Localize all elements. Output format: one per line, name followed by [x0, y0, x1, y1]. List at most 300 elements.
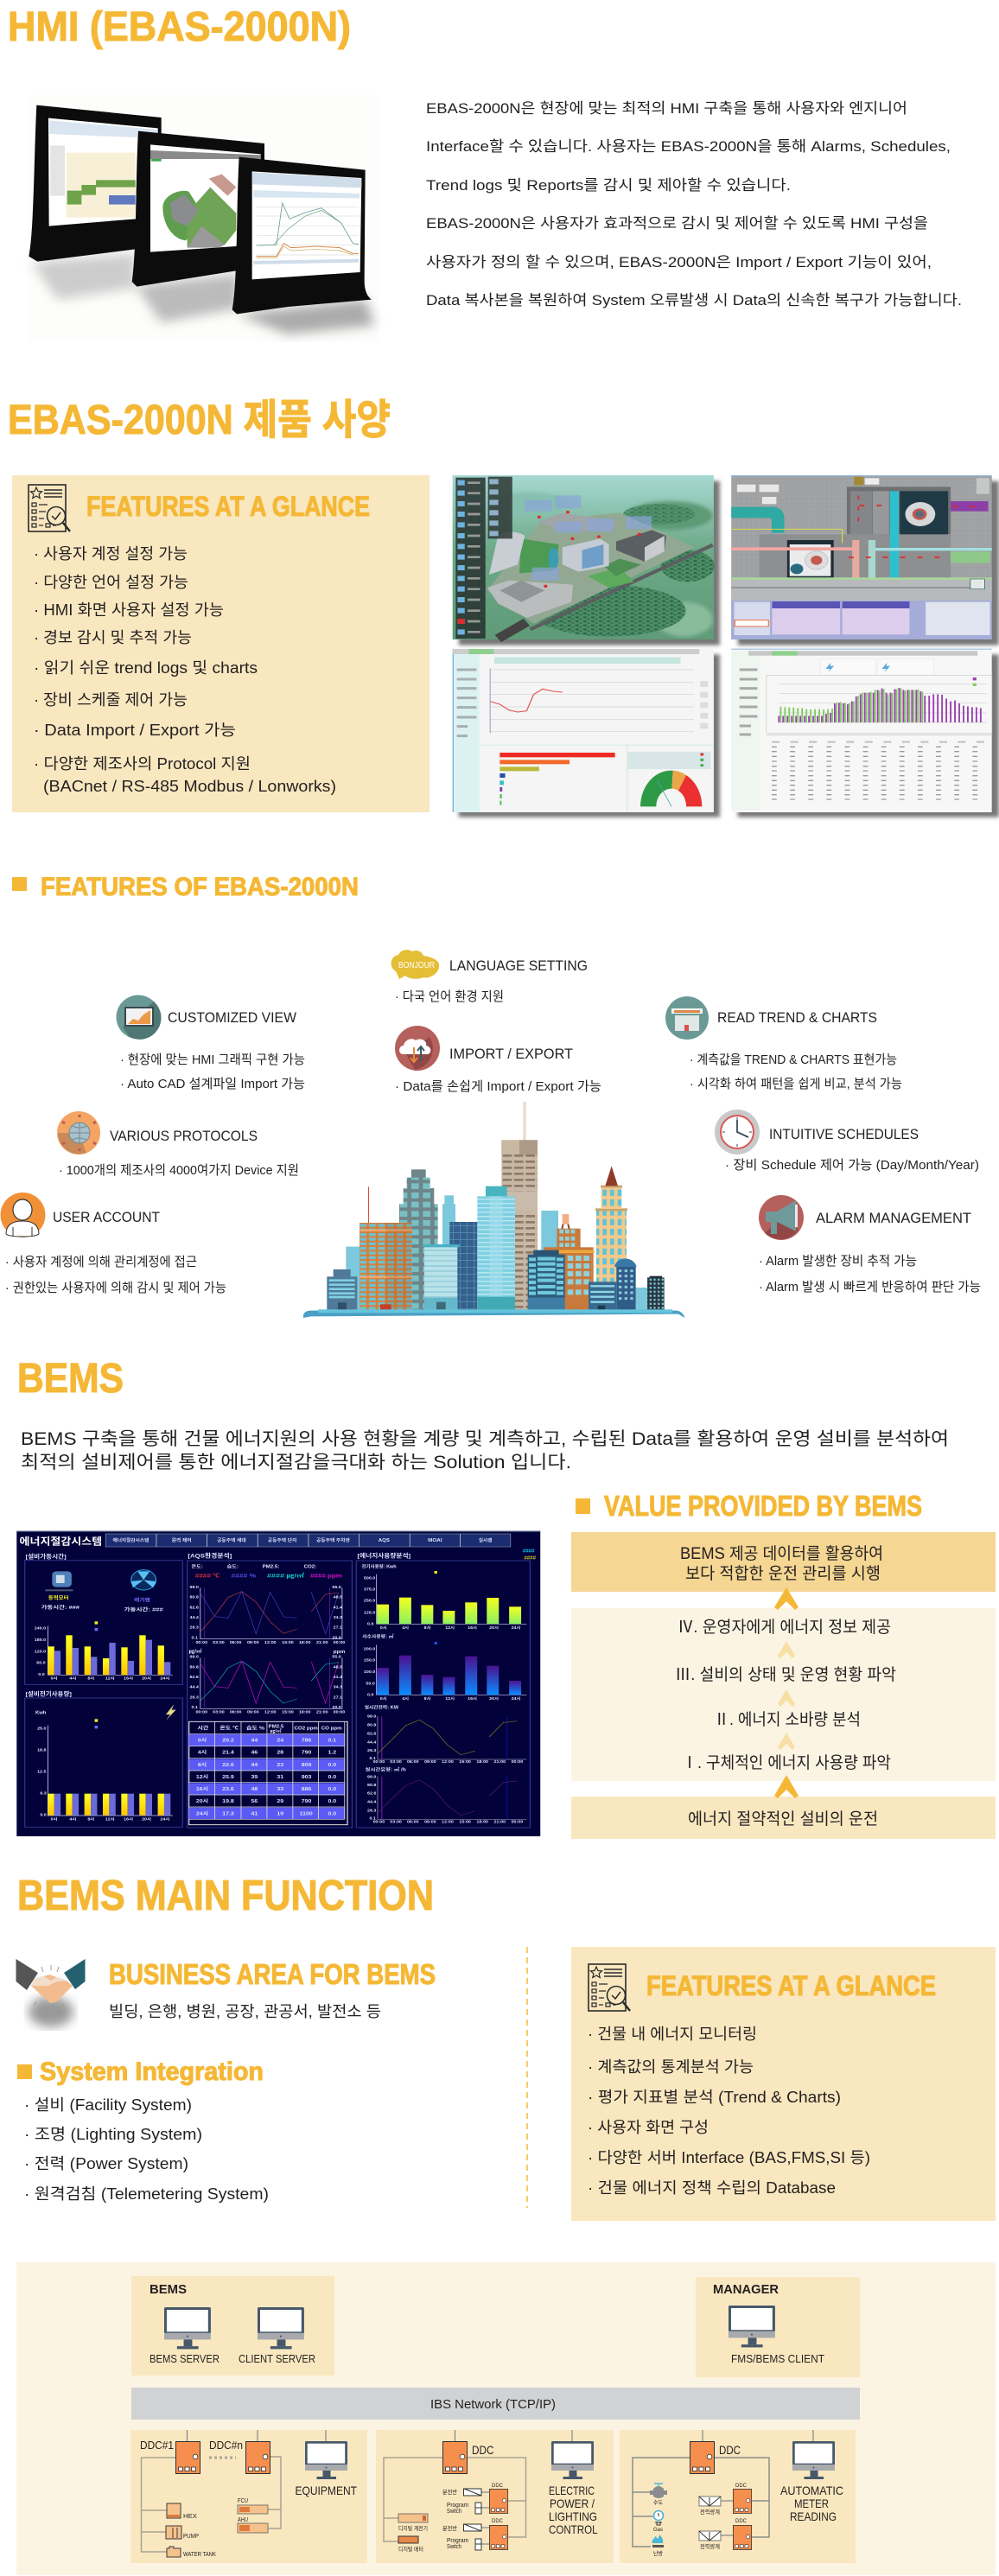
icon: bonjour cloud: BONJOUR	[398, 961, 435, 970]
data table: 0.0	[328, 1787, 337, 1792]
panel: energy use analysis: 50.0	[366, 1682, 375, 1686]
data table: 19	[277, 1811, 284, 1816]
title: HMI (EBAS-2000N): HMI (EBAS-2000N)	[8, 4, 351, 50]
panel: equipment running time: 240.0	[35, 1626, 46, 1631]
group: manager: FMS/BEMS CLIENT	[731, 2352, 824, 2365]
panel: energy use analysis: 62.6	[367, 1732, 377, 1736]
panel: energy use analysis: 0.0	[367, 1693, 374, 1697]
panel: energy use analysis: 8시	[424, 1696, 431, 1701]
heading: business area for BEMS: BUSINESS AREA FOR BEMS	[109, 1958, 436, 1990]
panel: energy use analysis: 0.1	[369, 1816, 376, 1821]
panel: energy use analysis: 12시	[445, 1696, 455, 1701]
panel: AQS environment analysis: 80.8	[189, 1595, 199, 1600]
panel: energy use analysis: 4시	[402, 1696, 409, 1701]
panel: equipment: DDC#n	[209, 2439, 243, 2452]
data table: 41	[251, 1811, 258, 1816]
monitor 2	[132, 131, 264, 287]
feature list: · 읽기 쉬운 trend logs 및 charts	[34, 659, 258, 677]
panel: automatic meter reading: READING	[790, 2509, 837, 2523]
bar: IBS network	[131, 2388, 860, 2420]
panel: energy use analysis: 62.6	[367, 1791, 377, 1796]
data table: 29	[277, 1799, 284, 1804]
group: BEMS servers	[131, 2276, 334, 2376]
data table: 44	[251, 1738, 258, 1743]
feature list: · 다양한 서버 Interface (BAS,FMS,SI 등)	[588, 2149, 870, 2166]
feature: alarm management: ALARM MANAGEMENT	[816, 1210, 971, 1226]
panel: energy use analysis: 16시	[468, 1696, 477, 1701]
data table: 20시	[196, 1799, 208, 1804]
feature: user account: · 사용자 계정에 의해 관리계정에 접근	[5, 1255, 197, 1269]
panel: equipment electricity use	[25, 1690, 182, 1827]
data table: 25.9	[222, 1775, 234, 1780]
panel: automatic meter reading: 전력량계	[700, 2508, 720, 2516]
panel: AQS environment analysis: 습도:	[227, 1563, 239, 1569]
panel: equipment electricity use: 12.5	[37, 1770, 47, 1774]
feature: various protocols: · 1000개의 제조사의 4000여가지 Device 지원	[59, 1163, 299, 1178]
panel: energy use analysis: 100.0	[364, 1670, 376, 1675]
panel: AQS environment analysis: 55.0	[332, 1585, 341, 1590]
panel: equipment running time: 가동시간: ###	[124, 1606, 163, 1612]
panel: AQS environment analysis: 15:00	[282, 1710, 294, 1714]
panel: energy use analysis: 0시	[380, 1625, 387, 1631]
feature: intuitive schedules: · 장비 Schedule 제어 가능 (Day/Month/Year)	[725, 1158, 979, 1173]
data table: 0.0	[328, 1763, 337, 1768]
dashboard: energy saving system	[16, 1531, 540, 1836]
panel: AQS environment analysis: 48.5	[334, 1665, 342, 1670]
panel: equipment: HEX	[183, 2514, 197, 2520]
text block: BEMS description: BEMS 구축을 통해 건물 에너지원의 사용 현황을 계량 및 계측하고, 수립된 Data를 활용하여 운영 설비를 분석하여	[21, 1429, 949, 1449]
panel: AQS environment analysis: 62.6	[189, 1675, 199, 1680]
panel: equipment electricity use: [설비전기사용량]	[26, 1690, 72, 1697]
icon: megaphone	[759, 1195, 804, 1240]
panel: energy use analysis: 99.0	[367, 1775, 377, 1779]
panel: energy use analysis: 200.0	[364, 1647, 376, 1651]
screen: bar chart and data table	[731, 649, 999, 817]
panel: electric power and lighting control: Switch	[447, 2544, 461, 2550]
panel: equipment electricity use: 0시	[51, 1817, 58, 1822]
data table: ㎍/㎥	[270, 1727, 283, 1734]
panel: equipment: PUMP	[183, 2534, 199, 2540]
panel: equipment running time: 가동시간: ###	[41, 1604, 80, 1611]
panel: energy use analysis: 00:00	[373, 1820, 385, 1824]
arrow: step 3	[778, 1641, 795, 1658]
panel: energy use analysis: 12:00	[442, 1820, 454, 1824]
panel: AQS environment analysis: 20.0	[332, 1636, 341, 1640]
text: business area list: 빌딩, 은행, 병원, 공장, 관공서, 발전소 등	[109, 2003, 381, 2020]
data table: 0시	[198, 1738, 207, 1743]
list: system integration items	[24, 2096, 269, 2203]
data table: 0.0	[328, 1775, 337, 1780]
panel: energy use analysis: 00:00	[512, 1820, 524, 1824]
feature: read trend and charts: · 시각화 하여 패턴을 쉽게 비교, 분석 가능	[690, 1077, 902, 1091]
heading: EBAS-2000N 제품 사양: EBAS-2000N 제품 사양	[8, 398, 391, 443]
panel: AQS environment analysis: 26.3	[189, 1695, 199, 1700]
panel: energy use analysis: 00:00	[512, 1759, 524, 1765]
data table: 44	[251, 1763, 258, 1768]
illustration: city skyline	[303, 1102, 684, 1318]
panel: equipment electricity use: 0.0	[40, 1813, 47, 1817]
panel: energy use analysis: 21:00	[493, 1820, 506, 1824]
arrow: step 2	[778, 1689, 795, 1707]
panel: AQS environment analysis: CO2:	[304, 1565, 316, 1569]
panel: AQS environment analysis: #### ppm	[310, 1574, 342, 1579]
feature list: · 사용자 계정 설정 가능	[34, 545, 188, 563]
panel: energy use analysis: 15:00	[459, 1759, 471, 1765]
panel: equipment running time: 60.0	[36, 1661, 46, 1665]
heading: system integration: System Integration	[40, 2058, 264, 2086]
data table: 0.0	[328, 1799, 337, 1804]
icon: laptop	[665, 996, 709, 1040]
group: manager	[696, 2277, 860, 2377]
feature: customized view	[116, 995, 305, 1091]
feature: customized view: · Auto CAD 설계파일 Import 가능	[120, 1077, 305, 1091]
panel: electric power and lighting control: 디지털 메터	[398, 2545, 423, 2553]
feature: user account: · 권한있는 사용자에 의해 감시 및 제어 가능	[5, 1281, 226, 1295]
data table: 0.0	[328, 1811, 337, 1816]
panel: electric power and lighting control: 디지털 계전기	[398, 2524, 428, 2532]
panel: AQS environment analysis: 34.3	[334, 1615, 342, 1620]
panel: energy use analysis: 0.1	[369, 1756, 376, 1761]
screenshots: four HMI screens	[453, 475, 999, 817]
panel: value ladder	[571, 1532, 996, 1839]
panel: AQS environment analysis: 44.4	[189, 1615, 199, 1620]
navigation tabs: 공동주택 주차장	[316, 1537, 350, 1543]
panel: energy use analysis: 26.3	[367, 1748, 377, 1753]
panel: equipment: EQUIPMENT	[296, 2484, 357, 2497]
panel: energy use analysis: 99.0	[367, 1714, 377, 1719]
data table: CO2 ppm	[295, 1727, 318, 1731]
icon: handshake	[16, 1959, 85, 2027]
panel: energy use analysis: 12:00	[442, 1759, 454, 1765]
panel: AQS environment analysis: 80.8	[189, 1665, 199, 1670]
screen: air handling unit	[731, 475, 999, 646]
data table: 39	[251, 1775, 258, 1780]
panel: automatic meter reading: METER	[794, 2496, 829, 2510]
panel: energy use analysis: 150.0	[364, 1658, 376, 1663]
data table: 886	[302, 1787, 312, 1792]
monitor 1	[29, 105, 162, 262]
box: value steps: Ⅲ. 설비의 상태 및 운영 현황 파악	[675, 1665, 896, 1684]
text block: HMI description	[426, 100, 962, 308]
image: three HMI monitors	[28, 95, 379, 341]
panel: AQS environment analysis: 15:00	[282, 1640, 294, 1645]
feature list: · 건물 에너지 정책 수립의 Database	[588, 2179, 836, 2197]
panel: equipment running time: 0.0	[38, 1672, 45, 1677]
panel: equipment running time: 8시	[87, 1676, 94, 1681]
data table: 28	[277, 1750, 284, 1755]
panel: equipment: WATER TANK	[183, 2552, 216, 2558]
navigation tabs: 공동주택 단지	[268, 1537, 296, 1543]
box: energy saving operation	[571, 1797, 996, 1839]
box: energy saving operation: 에너지 절약적인 설비의 운전	[688, 1810, 878, 1829]
panel: automatic meter reading: 수도	[653, 2499, 663, 2506]
panel: electric power and lighting control: DDC	[472, 2443, 494, 2457]
data table: 786	[302, 1738, 312, 1743]
panel: AQS environment analysis: 00:00	[195, 1640, 207, 1645]
panel: features at a glance	[12, 475, 430, 812]
feature list: · 장비 스케줄 제어 가능	[34, 691, 188, 709]
icon: clock	[715, 1110, 760, 1154]
feature list: (BACnet / RS-485 Modbus / Lonworks)	[43, 778, 336, 795]
panel: energy use analysis: [에너지사용량분석]	[358, 1551, 411, 1559]
panel: equipment running time: 12시	[105, 1676, 115, 1681]
panel: energy use analysis: 전기사용량: Kwh	[361, 1563, 397, 1569]
panel: automatic meter reading: Gas	[653, 2527, 664, 2533]
panel: energy use analysis: 실시간전력: KW	[365, 1704, 399, 1710]
data table: 시간	[198, 1724, 209, 1731]
panel: equipment running time: 배기팬	[134, 1596, 150, 1603]
panel: equipment running time: 20시	[142, 1676, 151, 1681]
panel: AQS environment analysis: 03:00	[213, 1710, 225, 1714]
panel: energy use analysis: 사수사용량: ㎥	[362, 1633, 394, 1639]
arrow: top	[774, 1587, 799, 1610]
panel: AQS environment analysis: 온도:	[192, 1564, 203, 1569]
data table: 23.6	[222, 1787, 234, 1792]
panel: AQS environment analysis: 0.1	[192, 1705, 198, 1710]
navigation tabs: 에너지절감시스템	[112, 1537, 149, 1543]
feature: read trend and charts: · 계측값을 TREND & CHARTS 표현가능	[690, 1053, 897, 1067]
panel: energy use analysis: 24시	[512, 1625, 520, 1631]
bar: IBS network: IBS Network (TCP/IP)	[430, 2397, 556, 2412]
panel: energy use analysis: 06:00	[407, 1820, 419, 1824]
panel: AQS environment analysis: PM2.5:	[263, 1565, 280, 1569]
panel: AQS environment analysis: 18:00	[299, 1710, 311, 1714]
panel: equipment electricity use: 12시	[105, 1817, 115, 1822]
panel: automatic meter reading: DDC	[735, 2518, 747, 2524]
feature list	[34, 545, 336, 795]
panel: energy use analysis: ####	[523, 1549, 535, 1554]
feature: customized view: · 현장에 맞는 HMI 그래픽 구현 가능	[120, 1053, 305, 1067]
list: system integration items: · 전력 (Power System)	[24, 2155, 188, 2172]
feature: import and export	[395, 1026, 601, 1094]
panel: energy use analysis: 00:00	[373, 1759, 385, 1765]
panel: AQS environment analysis: 55.0	[332, 1655, 341, 1659]
panel: automatic meter reading: 전력량계	[700, 2542, 720, 2550]
feature: read trend and charts: READ TREND & CHARTS	[717, 1009, 877, 1026]
panel: energy use analysis: 0시	[380, 1696, 387, 1701]
panel: energy use analysis: 03:00	[390, 1820, 402, 1824]
panel: AQS environment analysis: 06:00	[230, 1640, 242, 1645]
feature list: · Data Import / Export 가능	[34, 722, 236, 739]
group: manager: MANAGER	[713, 2282, 779, 2297]
panel: electric power and lighting control: Switch	[447, 2509, 461, 2515]
panel: energy use analysis: 500.0	[364, 1576, 376, 1581]
panel: electric power and lighting control: 분전반	[442, 2488, 457, 2496]
navigation tabs: 원격 제어	[172, 1537, 192, 1543]
feature list: · 경보 감시 및 추적 가능	[34, 629, 192, 646]
data table: CO ppm	[321, 1727, 342, 1731]
panel: AQS environment analysis: ppm	[334, 1650, 345, 1655]
panel: AQS environment analysis: [AQS환경분석]	[188, 1552, 232, 1559]
data table: 8시	[198, 1763, 207, 1768]
panel: AQS environment analysis: 99.0	[189, 1655, 199, 1659]
feature: customized view: CUSTOMIZED VIEW	[168, 1009, 296, 1026]
panel: equipment electricity use: 16시	[124, 1817, 133, 1822]
feature list: · 다양한 제조사의 Protocol 지원	[34, 755, 251, 773]
icon: bonjour cloud	[391, 950, 439, 979]
feature list	[588, 2026, 870, 2197]
box: operation management	[571, 1532, 996, 1592]
panel: BEMS features at a glance	[571, 1947, 996, 2221]
panel: equipment electricity use: 8시	[87, 1817, 94, 1822]
group: BEMS servers: BEMS SERVER	[150, 2352, 220, 2365]
panel: equipment electricity use: Kwh	[35, 1711, 47, 1715]
text block: HMI description: 사용자가 정의 할 수 있으며, EBAS-2000N은 Import / Export 기능이 있어,	[426, 254, 932, 270]
monitor 3	[232, 157, 372, 314]
panel: equipment running time: 180.0	[35, 1638, 46, 1643]
panel: AQS environment analysis: 18:00	[299, 1640, 311, 1645]
data table: 903	[302, 1775, 312, 1780]
data table: 31	[277, 1775, 284, 1780]
panel: energy use analysis: 실시간유량: ㎥ /h	[366, 1766, 406, 1772]
panel: electric power and lighting control: DDC	[492, 2518, 503, 2524]
feature: language setting: LANGUAGE SETTING	[449, 957, 588, 974]
feature: import and export: IMPORT / EXPORT	[449, 1046, 573, 1062]
icon: globe with arrows	[57, 1111, 100, 1154]
box: value steps: Ⅱ. 에너지 소바량 분석	[714, 1710, 861, 1729]
panel: AQS environment analysis: 21:00	[316, 1710, 328, 1714]
panel: electric power and lighting control: ELECTRIC	[549, 2484, 595, 2497]
feature: alarm management: · Alarm 발생한 장비 추적 가능	[759, 1254, 917, 1269]
data table: 790	[302, 1799, 312, 1804]
data table: 21.4	[222, 1750, 234, 1755]
panel: electric power and lighting control: DDC	[492, 2483, 503, 2489]
data table: 17.3	[222, 1811, 234, 1816]
data table: 22.6	[222, 1763, 234, 1768]
feature: language setting	[391, 950, 588, 1004]
heading: value provided by BEMS: VALUE PROVIDED BY BEMS	[604, 1490, 922, 1522]
panel: energy use analysis: 20시	[489, 1696, 499, 1701]
list: system integration items: · 설비 (Facility System)	[24, 2096, 192, 2114]
data table: 20.2	[222, 1738, 234, 1743]
icon: monitor chart	[116, 995, 162, 1040]
panel: energy use analysis: 12시	[445, 1625, 455, 1631]
feature: intuitive schedules	[715, 1110, 979, 1173]
data table: PM2.5	[269, 1725, 283, 1729]
icon: cloud with arrows	[395, 1026, 440, 1071]
diagram: BEMS system architecture	[16, 2262, 996, 2575]
data table: 46	[251, 1750, 258, 1755]
icon: checklist	[29, 485, 70, 531]
panel: equipment: DDC#1	[140, 2439, 174, 2452]
text block: HMI description: Data 복사본을 복원하여 System 오류발생 시 Data의 신속한 복구가 가능합니다.	[426, 292, 962, 308]
panel: automatic meter reading: AUTOMATIC	[780, 2484, 843, 2497]
panel: equipment running time: 120.0	[35, 1650, 46, 1654]
panel: AQS environment analysis: 06:00	[230, 1710, 242, 1714]
dashboard title: 에너지절감시스템	[20, 1536, 102, 1547]
heading: features at a glance: FEATURES AT A GLANCE	[86, 491, 370, 522]
heading: features at a glance: FEATURES AT A GLANCE	[646, 1970, 936, 2001]
text block: HMI description: Interface할 수 있습니다. 사용자는 EBAS-2000N을 통해 Alarms, Schedules,	[426, 138, 951, 155]
panel: energy use analysis: 06:00	[407, 1759, 419, 1765]
panel: energy use analysis: 03:00	[390, 1759, 402, 1765]
panel: AQS environment analysis: 20.0	[332, 1705, 341, 1710]
panel: equipment electricity use: 4시	[69, 1817, 76, 1822]
panel: energy use analysis: 24시	[512, 1696, 520, 1701]
panel: AQS environment analysis: 27.1	[334, 1695, 342, 1700]
panel: AQS environment analysis: 27.1	[334, 1625, 342, 1630]
data table: 1100	[300, 1811, 313, 1816]
panel: energy use analysis: 44.4	[367, 1800, 377, 1804]
data table: 4시	[198, 1750, 207, 1755]
panel: automatic meter reading: 난방	[653, 2549, 663, 2557]
navigation tabs: 공동주택 세대	[217, 1537, 246, 1543]
data table: 23	[277, 1763, 284, 1768]
arrow: bottom	[774, 1775, 799, 1798]
panel: automatic meter reading: DDC	[735, 2483, 747, 2489]
panel: AQS environment analysis: 00:00	[334, 1710, 346, 1714]
panel: electric power and lighting control: POWER /	[550, 2496, 595, 2510]
data table: 48	[251, 1787, 258, 1792]
text block: HMI description: Trend logs 및 Reports를 감시 및 제아할 수 있습니다.	[426, 177, 791, 194]
box: value steps	[571, 1608, 996, 1781]
data table: 24시	[196, 1811, 208, 1816]
list: system integration items: · 조명 (Lighting System)	[24, 2126, 202, 2143]
data table: 809	[302, 1763, 312, 1768]
panel: AQS environment analysis: 62.6	[189, 1606, 199, 1610]
panel: equipment electricity use: 20시	[142, 1817, 151, 1822]
panel: energy use analysis: 09:00	[424, 1820, 436, 1824]
panel: equipment running time: [설비가동시간]	[26, 1552, 67, 1560]
data table: 16시	[196, 1787, 208, 1792]
panel: energy use analysis: 21:00	[493, 1759, 506, 1765]
panel: electric power and lighting control: LIGHTING	[549, 2509, 597, 2523]
title: BEMS main function: BEMS MAIN FUNCTION	[17, 1873, 434, 1919]
panel: electric power and lighting control: Program	[447, 2538, 468, 2544]
navigation tabs: MOAI	[428, 1538, 442, 1543]
panel: energy use analysis: 250.0	[364, 1599, 376, 1603]
panel: equipment: FCU	[238, 2498, 248, 2504]
panel: energy use analysis: 16시	[468, 1625, 477, 1631]
data table: 12시	[196, 1775, 208, 1780]
text block: HMI description: EBAS-2000N은 현장에 맞는 최적의 HMI 구축을 통해 사용자와 엔지니어	[426, 100, 907, 117]
panel: energy use analysis: 80.8	[367, 1723, 377, 1727]
data table: 790	[302, 1750, 312, 1755]
panel: AQS environment analysis: 00:00	[334, 1640, 346, 1645]
data table: 1.2	[328, 1750, 337, 1755]
panel: AQS environment analysis: 09:00	[247, 1710, 259, 1714]
panel: energy use analysis	[356, 1549, 537, 1828]
panel: AQS environment analysis: 26.3	[189, 1625, 199, 1630]
panel: AQS environment analysis: 41.4	[334, 1606, 342, 1610]
panel: energy use analysis: 09:00	[424, 1759, 436, 1765]
panel: equipment electricity use: 6.3	[40, 1791, 47, 1796]
feature list: · 계측값의 통계분석 가능	[588, 2058, 754, 2076]
box: value steps: Ⅰ. 구체적인 에너지 사용량 파악	[682, 1753, 891, 1772]
data table: 56	[251, 1799, 258, 1804]
panel: energy use analysis: 80.8	[367, 1783, 377, 1788]
arrow: step 1	[778, 1733, 795, 1750]
group: BEMS servers: CLIENT SERVER	[239, 2352, 315, 2365]
panel: AQS environment analysis: 09:00	[247, 1640, 259, 1645]
icon: user	[0, 1193, 45, 1237]
feature: various protocols: VARIOUS PROTOCOLS	[110, 1128, 258, 1144]
panel: AQS environment analysis: 44.4	[189, 1685, 199, 1689]
panel: energy use analysis: 375.0	[364, 1587, 376, 1592]
feature list: · 평가 지표별 분석 (Trend & Charts)	[588, 2089, 841, 2106]
panel: automatic meter reading: DDC	[719, 2443, 741, 2457]
panel: AQS environment analysis: 41.4	[334, 1675, 342, 1680]
feature list: · 사용자 화면 구성	[588, 2119, 709, 2136]
panel: AQS environment analysis: 12:00	[264, 1710, 277, 1714]
feature list: · HMI 화면 사용자 설정 가능	[34, 601, 224, 619]
feature: user account: USER ACCOUNT	[53, 1209, 160, 1225]
text block: HMI description: EBAS-2000N은 사용자가 효과적으로 감시 및 제어할 수 있도록 HMI 구성을	[426, 215, 928, 232]
screen: trend chart and gauge	[453, 649, 720, 817]
feature: language setting: · 다국 언어 환경 지원	[395, 989, 504, 1004]
panel: AQS environment analysis: #### ㎍/㎥	[267, 1572, 304, 1580]
data table: 0.1	[328, 1738, 337, 1743]
